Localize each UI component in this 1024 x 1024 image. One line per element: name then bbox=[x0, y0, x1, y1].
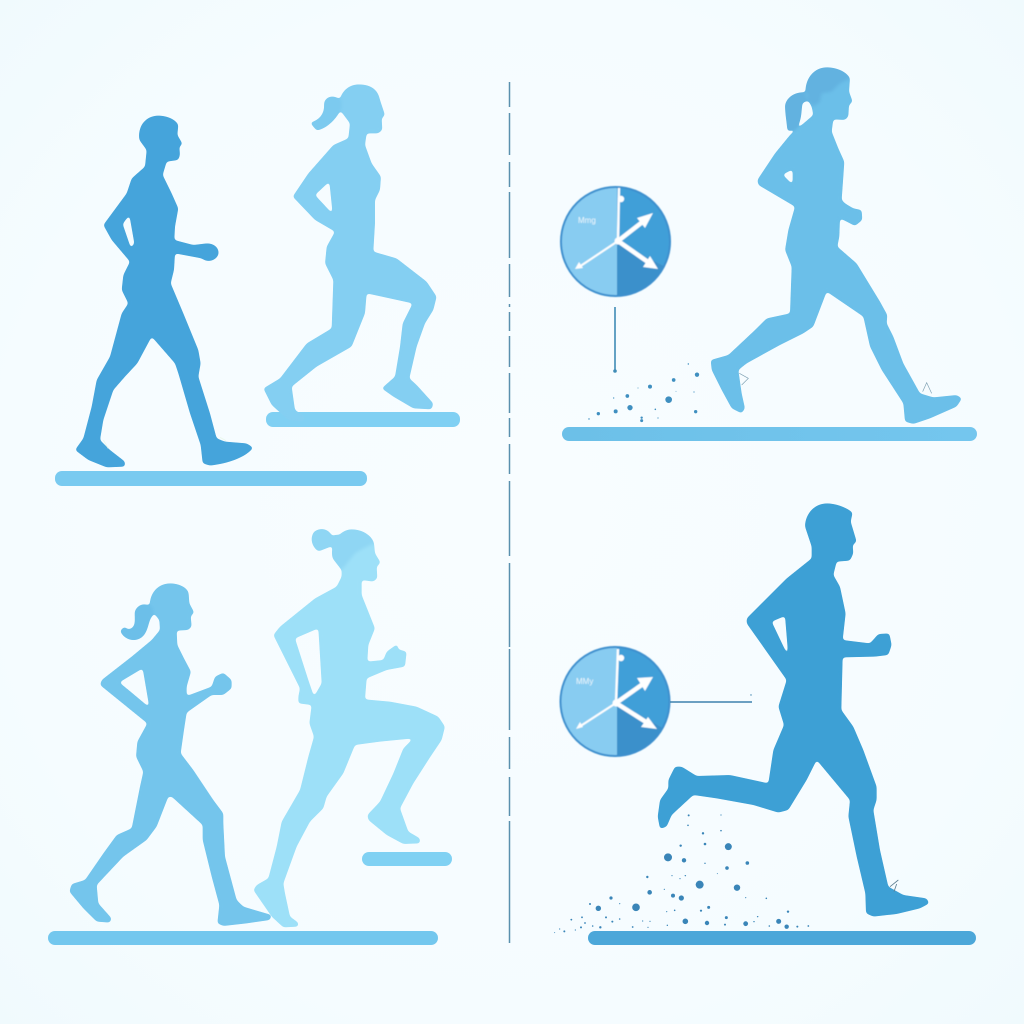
ponytail bbox=[120, 604, 153, 640]
particles: bottom right runner bbox=[554, 814, 809, 933]
figure: running man, bottom right bbox=[658, 503, 929, 917]
dial: top: Mmg bbox=[578, 216, 596, 225]
figure: high-knee woman, bottom middle bbox=[253, 529, 445, 927]
figure: jogging woman, top right bbox=[711, 67, 962, 424]
ground bar: bottom left bbox=[48, 931, 438, 945]
dial: bottom: MMy bbox=[576, 677, 593, 686]
hair and ponytail bbox=[785, 67, 850, 131]
ground bar: top right bbox=[562, 427, 977, 441]
hair bun bbox=[312, 529, 374, 570]
ground bar: top middle platform bbox=[266, 412, 460, 427]
figure: jogging woman, top middle bbox=[263, 84, 437, 422]
figure: walking man, top left bbox=[75, 116, 253, 467]
ponytail bbox=[310, 97, 342, 131]
arrow: bottom dial to runner bbox=[670, 694, 752, 702]
arrow: top dial down to particles bbox=[613, 307, 617, 373]
ground bar: top left bbox=[55, 471, 367, 486]
dial: top bbox=[560, 186, 670, 296]
dial: bottom bbox=[560, 646, 670, 756]
figure: jogging woman, bottom left bbox=[69, 583, 272, 926]
ground bar: bottom right bbox=[588, 931, 976, 945]
small floating platform bbox=[362, 852, 452, 866]
particles: top right runner bbox=[588, 363, 699, 422]
center divider dashed line bbox=[508, 82, 510, 943]
